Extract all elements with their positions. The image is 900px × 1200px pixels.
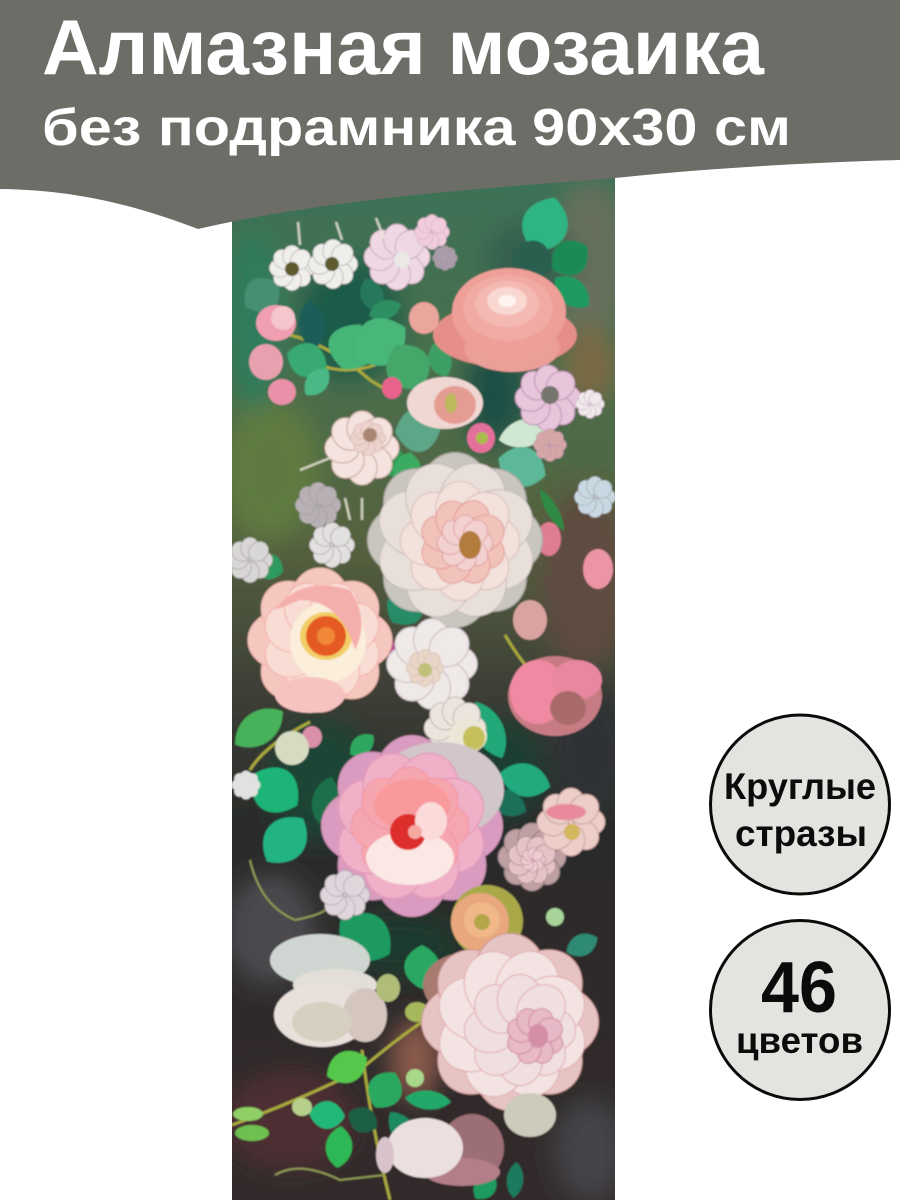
subtitle: без подрамника 90х30 см (42, 99, 791, 157)
flower: deep pink rose right (508, 656, 602, 736)
flower: pale peach rose right (537, 788, 605, 856)
header banner (0, 0, 900, 229)
flower: white rose left of centre (325, 411, 399, 485)
flower: pink peony (320, 734, 506, 918)
fine white sprays (298, 218, 384, 520)
badge: round rhinestones: Круглые (724, 766, 876, 807)
painted canvas background (232, 178, 615, 1200)
title: Алмазная мозаика (42, 3, 765, 91)
flower: large white-pink rose bottom (420, 932, 600, 1112)
flower: large white rose (366, 451, 544, 628)
flower: small rose buds left (249, 302, 613, 748)
flower: dusty rose (498, 823, 566, 892)
badge: 46 colours: 46 (761, 948, 837, 1028)
badge: round rhinestones (710, 715, 890, 894)
flower: mauve and white bloom bottom (376, 1093, 556, 1186)
flower: white rose lower left (270, 934, 387, 1047)
badge: 46 colours (710, 920, 890, 1100)
flower: peach ranunculus (451, 885, 564, 957)
flower: lilac blossom right (515, 365, 604, 461)
flower: white rose centre (387, 619, 477, 709)
flower: small white blossoms top (269, 239, 358, 291)
foliage and stems (226, 190, 602, 1200)
flower: salmon ranunculus (433, 268, 577, 372)
flower: small green buds (233, 974, 429, 1141)
badge: 46 colours: цветов (736, 1020, 863, 1061)
flower: cream rose (424, 697, 487, 759)
flower: pale pink blossom top (364, 214, 457, 290)
flower: pale blossoms left edge (227, 476, 616, 583)
flower: peach open rose with orange centre (244, 562, 400, 718)
flower: white-lilac bloom under peony (320, 870, 370, 920)
flower: bud white-green left (232, 731, 309, 799)
panel: floral painting (232, 178, 615, 1200)
flower: pale bud rose centre (407, 377, 483, 429)
badge: round rhinestones: стразы (735, 813, 867, 854)
